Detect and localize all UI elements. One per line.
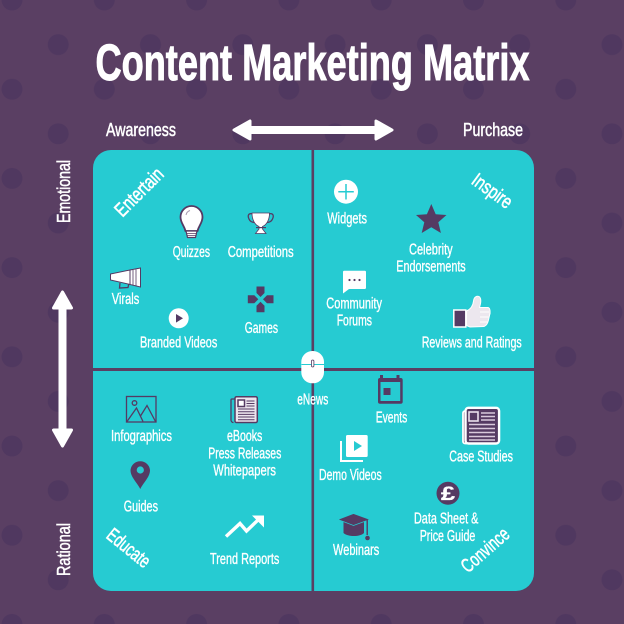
item: Quizzes: Quizzes <box>173 244 210 261</box>
item: Data Sheet & Price Guide: Data Sheet & <box>414 511 479 528</box>
item: Widgets <box>327 180 367 227</box>
axis label: Awareness: Awareness <box>106 119 176 140</box>
item: Case Studies: Case Studies <box>449 449 513 466</box>
item: eNews <box>297 351 328 408</box>
item: Community Forums: Community <box>326 295 382 312</box>
axis label: Emotional: Emotional <box>53 160 74 223</box>
item: eBooks, Press Releases, Whitepapers: eBooks <box>227 428 262 445</box>
item: Trend Reports: Trend Reports <box>210 551 279 568</box>
icon: chat bubble <box>343 271 366 294</box>
item: Data Sheet & Price Guide: Price Guide <box>420 528 475 545</box>
quadrant title: Entertain: Entertain <box>110 163 168 221</box>
item: eBooks, Press Releases, Whitepapers: Whitepapers <box>213 462 276 479</box>
icon: image frame <box>126 396 156 422</box>
item: Demo Videos: Demo Videos <box>319 467 382 484</box>
icon: large newspaper <box>463 408 499 444</box>
icon: game d-pad <box>248 286 274 312</box>
item: Guides: Guides <box>124 499 158 516</box>
item: Competitions <box>228 213 294 261</box>
item: eBooks, Press Releases, Whitepapers: Press Releases <box>208 445 281 462</box>
item: Webinars: Webinars <box>333 542 379 559</box>
quadrant: Convince <box>319 375 514 577</box>
matrix horizontal divider <box>93 368 534 371</box>
item: Events <box>376 375 407 427</box>
item: Virals: Virals <box>112 291 139 308</box>
icon: megaphone <box>110 268 140 288</box>
axis label: Rational: Rational <box>53 523 74 576</box>
item: Reviews and Ratings: Reviews and Ratings <box>422 334 522 351</box>
icon: light bulb <box>180 206 202 238</box>
item: Case Studies <box>449 408 513 466</box>
quadrant title: Educate: Educate <box>102 524 155 573</box>
icon: trophy <box>248 213 273 234</box>
arrow: horizontal double-headed <box>234 121 392 139</box>
item: eBooks, Press Releases, Whitepapers <box>208 397 281 479</box>
arrow: vertical double-headed <box>54 292 72 446</box>
icon: thumbs up <box>454 296 490 327</box>
quadrant: Entertain <box>110 163 294 351</box>
item: Demo Videos <box>319 435 382 484</box>
item: Celebrity Endorsements <box>396 204 466 276</box>
quadrant title: Convince: Convince <box>457 523 514 577</box>
icon: plus circle <box>334 180 358 204</box>
item: Infographics: Infographics <box>111 428 172 445</box>
item: Celebrity Endorsements: Endorsements <box>396 259 466 276</box>
item: Virals <box>110 268 140 308</box>
item: Data Sheet & Price Guide <box>414 482 479 545</box>
item: Events: Events <box>376 410 407 427</box>
item: Infographics <box>111 396 172 445</box>
quadrant title: Inspire: Inspire <box>467 169 517 213</box>
matrix vertical divider <box>312 150 314 591</box>
icon: play button <box>169 308 189 328</box>
item: Community Forums: Forums <box>337 313 372 330</box>
item: Trend Reports <box>210 516 279 568</box>
item: Guides <box>124 461 158 516</box>
quadrant: Educate <box>102 396 281 573</box>
item: Quizzes <box>173 206 210 261</box>
matrix panel <box>93 150 534 591</box>
item: Webinars <box>333 514 379 559</box>
item: Competitions: Competitions <box>228 244 294 261</box>
item: Community Forums <box>326 271 382 330</box>
icon: map pin <box>130 461 150 489</box>
icon: video stack <box>341 435 368 461</box>
item: Reviews and Ratings <box>422 296 522 351</box>
item: Branded Videos <box>140 308 217 351</box>
item: Widgets: Widgets <box>327 210 367 227</box>
item: Celebrity Endorsements: Celebrity <box>409 241 453 258</box>
icon: computer mouse <box>301 351 324 383</box>
item: eNews: eNews <box>297 391 328 408</box>
icon: graduation cap <box>338 514 370 540</box>
quadrant: Inspire <box>326 169 522 351</box>
icon: small newspaper <box>231 397 257 422</box>
axis label: Purchase: Purchase <box>463 119 523 140</box>
item: Games <box>245 286 278 337</box>
item: Games: Games <box>245 320 278 337</box>
icon: calendar <box>378 375 403 404</box>
icon: pound coin: £ <box>441 484 456 505</box>
icon: star <box>416 204 446 233</box>
item: Branded Videos: Branded Videos <box>140 334 217 351</box>
icon: trend arrow <box>226 516 264 536</box>
